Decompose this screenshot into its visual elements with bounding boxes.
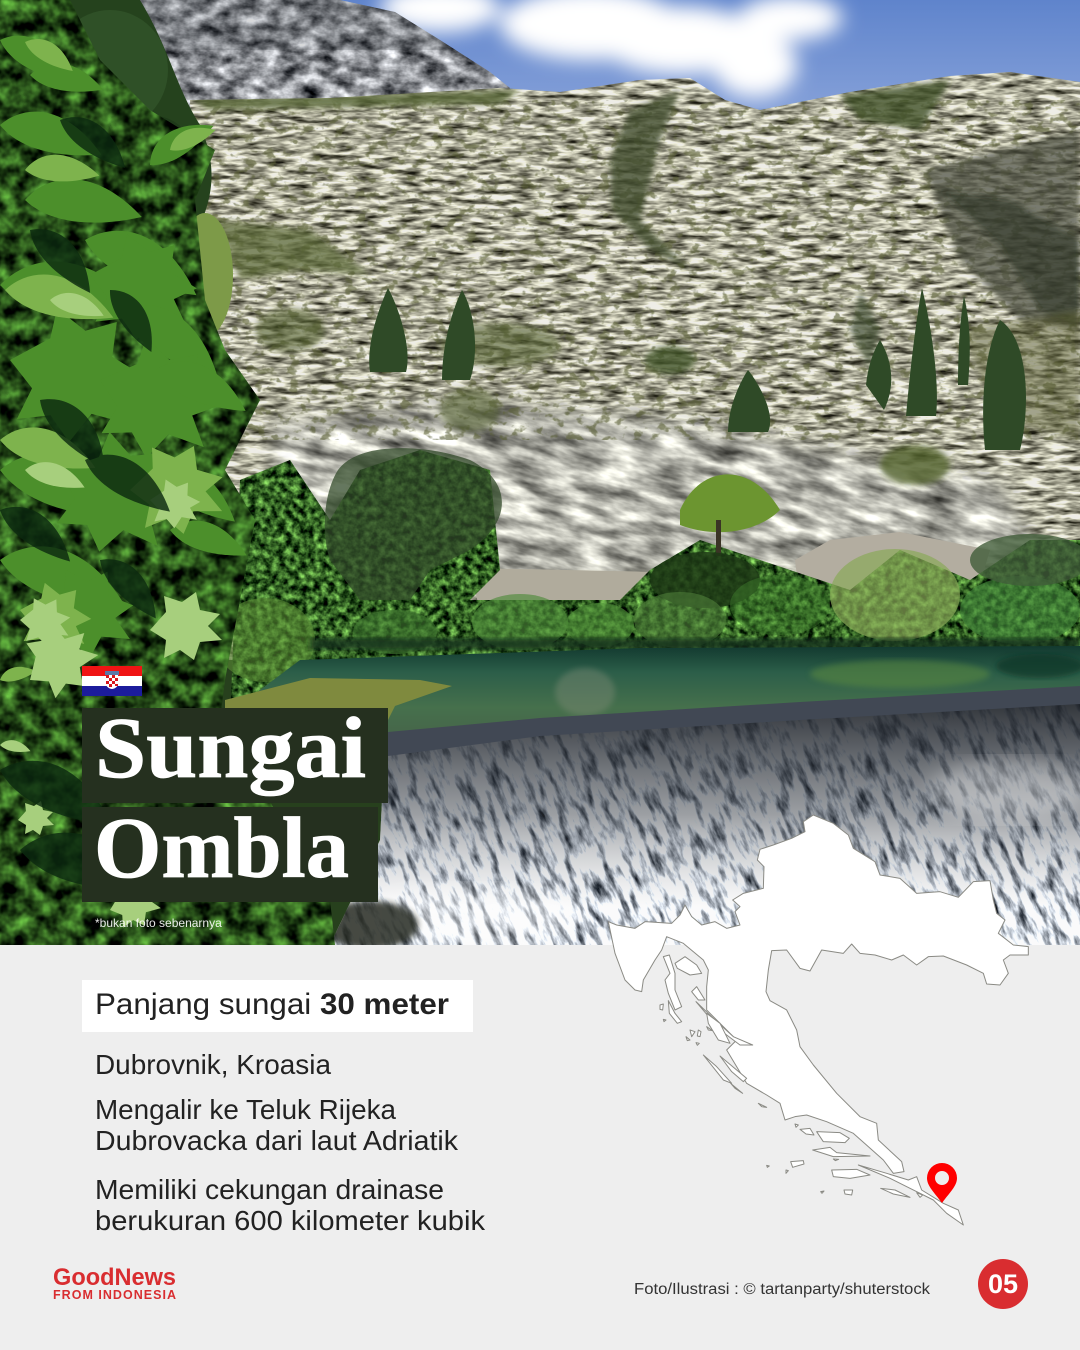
shaded crags and vegetation bbox=[190, 80, 1080, 485]
waterfall foam bbox=[334, 704, 1080, 945]
conifer trees on the slope bbox=[369, 288, 1026, 450]
title text: Ombla bbox=[94, 799, 349, 896]
fact text lines: Mengalir ke Teluk Rijeka bbox=[95, 1094, 396, 1125]
tree and bushes band beside river bbox=[228, 448, 1080, 698]
weir lip bbox=[388, 686, 1080, 756]
dark evergreen behind foliage bbox=[20, 0, 233, 337]
title box: Ombla bbox=[82, 807, 378, 902]
title text: Sungai bbox=[95, 699, 366, 796]
left foreground fig foliage bbox=[0, 0, 360, 945]
title box: Sungai bbox=[82, 708, 388, 803]
page number badge: 05 bbox=[988, 1269, 1018, 1299]
upper rock cliff bbox=[140, 0, 510, 108]
limestone wall and building bbox=[470, 532, 990, 612]
logo: GoodNews from Indonesia: FROM INDONESIA bbox=[53, 1288, 176, 1302]
base underlay behind lower photo bbox=[0, 500, 1080, 945]
logo: GoodNews from Indonesia: GoodNews bbox=[53, 1264, 176, 1291]
fact text lines: berukuran 600 kilometer kubik bbox=[95, 1205, 486, 1236]
photo credit: Foto/Ilustrasi : © tartanparty/shuterstock bbox=[634, 1281, 930, 1298]
fact text lines: Dubrovnik, Kroasia bbox=[95, 1049, 331, 1080]
main karst mountainside bbox=[190, 72, 1080, 660]
sky with clouds bbox=[0, 0, 1080, 140]
flag of Croatia bbox=[82, 666, 142, 696]
islands bbox=[660, 955, 963, 1225]
grassy bank bbox=[225, 678, 452, 726]
river surface bbox=[225, 646, 1080, 734]
fact text lines: Panjang sungai 30 meter bbox=[95, 988, 449, 1021]
vegetation speckle bbox=[196, 100, 1080, 440]
photo: river weir below karst mountain bbox=[0, 0, 1080, 945]
fact text lines: Dubrovacka dari laut Adriatik bbox=[95, 1125, 459, 1156]
mainland outline bbox=[608, 815, 1028, 1173]
page number badge bbox=[978, 1259, 1028, 1309]
location pin bbox=[927, 1163, 957, 1203]
fact text lines: Memiliki cekungan drainase bbox=[95, 1174, 444, 1205]
length highlight box bbox=[82, 980, 473, 1032]
note: not actual photo: *bukan foto sebenarnya bbox=[95, 916, 222, 930]
